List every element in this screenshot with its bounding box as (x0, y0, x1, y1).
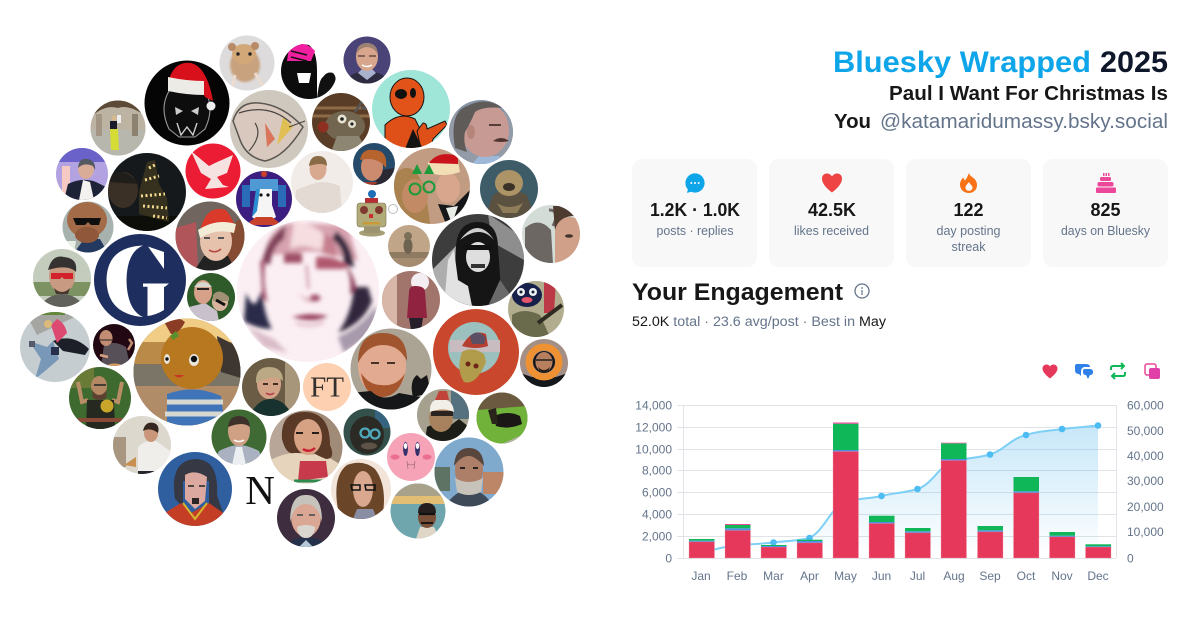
stat card: days on bluesky (1043, 159, 1168, 267)
avatar: dog on grass (476, 392, 528, 444)
icon: likes heart (1042, 364, 1058, 378)
reposts bars (689, 424, 1111, 546)
icon: info (855, 284, 869, 298)
left axis labels: 4,000 (642, 508, 672, 522)
month labels: Feb (727, 569, 748, 583)
avatar: pingu with gun (508, 281, 564, 337)
stat card: posting streak (906, 159, 1031, 267)
avatar: man white shirt cafe (112, 415, 172, 475)
avatar: black and white woman (432, 214, 524, 306)
right axis labels: 40,000 (1127, 449, 1164, 463)
avatar: man yellow t-shirt mural (69, 367, 131, 429)
stacked bars (689, 422, 1111, 558)
stat card: likes received: likes received (794, 223, 869, 238)
avatar: man red sunglasses (32, 248, 92, 308)
avatar: hamster (219, 35, 275, 91)
avatar: red with bird puppet (433, 309, 519, 395)
icon: speech bubble (685, 173, 705, 193)
avatar: family falling (20, 312, 90, 382)
month labels: Dec (1087, 569, 1109, 583)
month labels: Jul (910, 569, 925, 583)
stat card: likes received (769, 159, 894, 267)
avatar: man with grey beard (434, 437, 505, 507)
stat card: posts and replies: 1.2K · 1.0K (650, 200, 740, 220)
stat card: posts and replies: posts · replies (656, 223, 734, 238)
avatar: older man with glasses (344, 36, 390, 84)
avatar: woman yellow skirt in cloister (90, 100, 146, 156)
avatar: woman long hair glasses (331, 459, 391, 520)
icon: cake (1096, 173, 1116, 193)
avatar: black hand on pink (281, 43, 337, 99)
cumulative line (701, 426, 1098, 553)
avatar: couple selfie (187, 273, 235, 321)
stat card: posting streak: 122 (954, 200, 984, 220)
avatar: guardian logo (94, 234, 186, 326)
month labels: Sep (979, 569, 1001, 583)
avatar: orange mascot (133, 317, 241, 426)
title: bluesky wrapped: Bluesky Wrapped (833, 46, 1091, 79)
month labels: May (834, 569, 857, 583)
avatar: toy robot (357, 190, 398, 236)
avatar: bearded man (350, 328, 432, 410)
icon: reposts arrows (1111, 363, 1125, 379)
avatar: motorhead santa skull (144, 60, 230, 146)
avatar: kirby (387, 433, 435, 481)
left axis labels: 12,000 (635, 420, 672, 434)
icon: heart (822, 174, 842, 192)
avatar: financial times logo (303, 363, 351, 411)
month labels (691, 569, 1109, 583)
display name continuation: You (834, 111, 871, 133)
avatar: butterfly sketch (229, 89, 309, 169)
avatar: selfie with christmas tree lights (107, 152, 187, 234)
left axis labels: 2,000 (642, 530, 672, 544)
stat card: days on bluesky: 825 (1090, 200, 1120, 220)
avatar: dog with sunglasses (62, 201, 114, 253)
title: year: 2025 (1100, 46, 1168, 79)
avatar: spider-man cartoon (371, 69, 451, 149)
icon: replies bubbles (1075, 364, 1093, 379)
left axis labels: 0 (665, 552, 672, 566)
avatar: man with mammoth museum (521, 204, 581, 264)
header (833, 46, 1168, 133)
avatar: woman christmas jumper (269, 410, 343, 484)
avatar: cyberman cartoon (236, 171, 292, 227)
month labels: Oct (1017, 569, 1036, 583)
handle: @katamaridumassy.bsky.social (880, 111, 1168, 133)
right axis labels (1127, 398, 1164, 566)
left axis labels: 14,000 (635, 398, 672, 412)
quotes bars (725, 422, 966, 525)
left axis labels: 6,000 (642, 486, 672, 500)
avatar: man white t-shirt (291, 151, 353, 213)
avatar: speaker with microphone (93, 324, 135, 366)
avatar: selfie in red dress (381, 270, 441, 330)
avatar: dragon man illustration (158, 452, 232, 526)
right axis labels: 10,000 (1127, 525, 1164, 539)
avatar: sea otter (479, 159, 539, 219)
engagement summary: 52.0K total · 23.6 avg/post · Best in May (632, 314, 886, 329)
avatar: ginger man profile (353, 143, 395, 185)
avatar: new york times N logo: N (245, 467, 275, 513)
avatar: man with moustache (448, 99, 514, 165)
icon: quotes squares (1145, 364, 1160, 379)
stat card: posting streak: day posting (936, 223, 1000, 238)
right axis labels: 50,000 (1127, 424, 1164, 438)
avatar: blurred main portrait (236, 219, 380, 363)
month labels: Mar (763, 569, 784, 583)
right axis labels: 60,000 (1127, 398, 1164, 412)
cumulative points (770, 422, 1101, 546)
stat card: likes received: 42.5K (808, 200, 856, 220)
avatar: jeremy corbyn (276, 488, 336, 548)
left axis labels (635, 398, 672, 566)
avatar: man in suit (211, 409, 267, 465)
month labels: Nov (1051, 569, 1073, 583)
month labels: Aug (943, 569, 965, 583)
right axis labels: 0 (1127, 552, 1134, 566)
replies bars (689, 450, 1111, 547)
avatar bubble cluster (20, 35, 581, 548)
stat card: days on bluesky: days on Bluesky (1061, 223, 1150, 238)
month labels: Jun (872, 569, 891, 583)
right axis labels: 30,000 (1127, 474, 1164, 488)
left axis labels: 8,000 (642, 464, 672, 478)
stat card: posts and replies (632, 159, 757, 267)
chart: monthly engagement (635, 398, 1164, 583)
month labels: Apr (800, 569, 819, 583)
avatar: independent eagle (185, 143, 241, 199)
grid lines (677, 405, 1116, 558)
avatar: financial times logo: FT (310, 372, 344, 404)
avatar: cat (388, 225, 430, 268)
avatar: woman with santa hat (175, 201, 245, 271)
month labels: Jan (691, 569, 711, 583)
avatar: reindeer puppet (311, 92, 371, 152)
avatar: presenter purple sky (56, 148, 108, 200)
avatar: blonde woman selfie (241, 357, 301, 417)
avatar: beyonce and robert party (394, 148, 470, 224)
heading: your engagement: Your Engagement (632, 279, 843, 306)
stat card: posting streak: streak (952, 239, 986, 254)
avatar: man in marigold wreath (520, 339, 568, 387)
likes bars (689, 451, 1111, 558)
chart legend (1042, 363, 1160, 379)
avatar: ape painting (343, 408, 391, 456)
display name: Paul I Want For Christmas Is (889, 83, 1168, 105)
icon: flame (960, 173, 977, 193)
avatar: man glasses by sea (390, 483, 446, 539)
left axis labels: 10,000 (635, 442, 672, 456)
avatar: man in bobble hat (417, 389, 469, 441)
right axis labels: 20,000 (1127, 500, 1164, 514)
cumulative area (701, 426, 1098, 558)
